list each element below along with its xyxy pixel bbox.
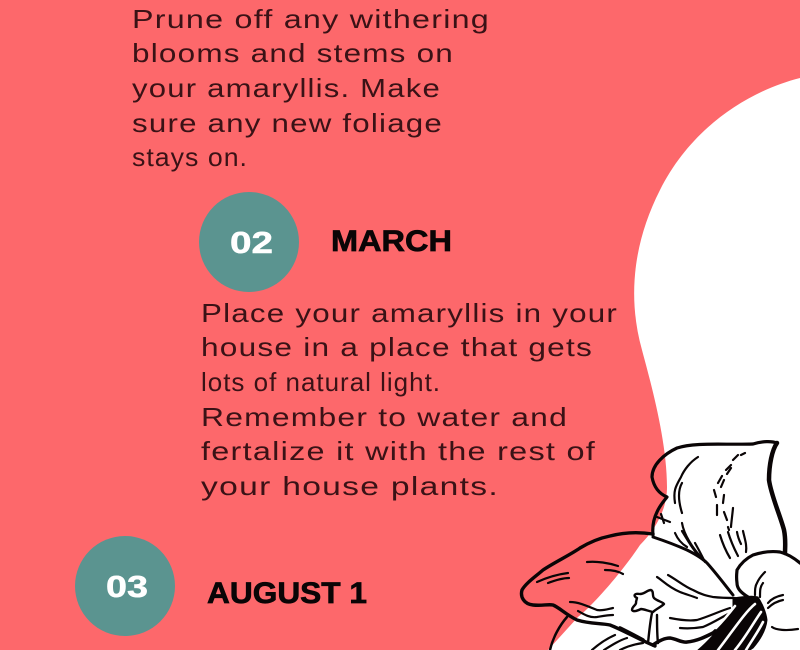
step 2 number badge xyxy=(199,192,299,292)
flower lower edge xyxy=(620,610,733,645)
icon: amaryllis flower illustration xyxy=(521,442,800,650)
step 2 heading: MARCH xyxy=(331,225,452,258)
step 3 heading: AUGUST 1 xyxy=(207,577,367,610)
step 2 text block: your house plants. xyxy=(201,471,499,501)
step 2 text block: house in a place that gets xyxy=(201,332,593,362)
step 1 text block: stays on. xyxy=(132,142,248,172)
upright petal thick right edge xyxy=(769,443,785,553)
step 1 text block xyxy=(132,4,490,172)
flower stamen xyxy=(632,590,664,643)
step 2 text block xyxy=(201,298,618,501)
step 2 text block: Place your amaryllis in your xyxy=(201,298,618,328)
step 1 text block: sure any new foliage xyxy=(132,108,443,138)
upright petal xyxy=(652,442,777,535)
left petal xyxy=(521,533,655,646)
left petal lower edge xyxy=(550,617,567,650)
lower centre petal xyxy=(653,537,733,595)
step 2 text block: fertalize it with the rest of xyxy=(201,436,596,466)
flower throat xyxy=(698,596,767,650)
right petal xyxy=(737,552,800,597)
step 1 text block: blooms and stems on xyxy=(132,38,454,68)
step 3 number badge: 03 xyxy=(106,569,148,604)
step 2 number badge: 02 xyxy=(230,225,273,260)
step 1 text block: your amaryllis. Make xyxy=(132,73,441,103)
petal veins xyxy=(537,453,798,650)
step 1 text block: Prune off any withering xyxy=(132,4,490,34)
step 3 number badge xyxy=(75,536,175,636)
step 2 text block: lots of natural light. xyxy=(201,367,441,397)
throat stripes xyxy=(716,604,763,650)
white blob xyxy=(548,78,800,650)
step 2 text block: Remember to water and xyxy=(201,402,568,432)
